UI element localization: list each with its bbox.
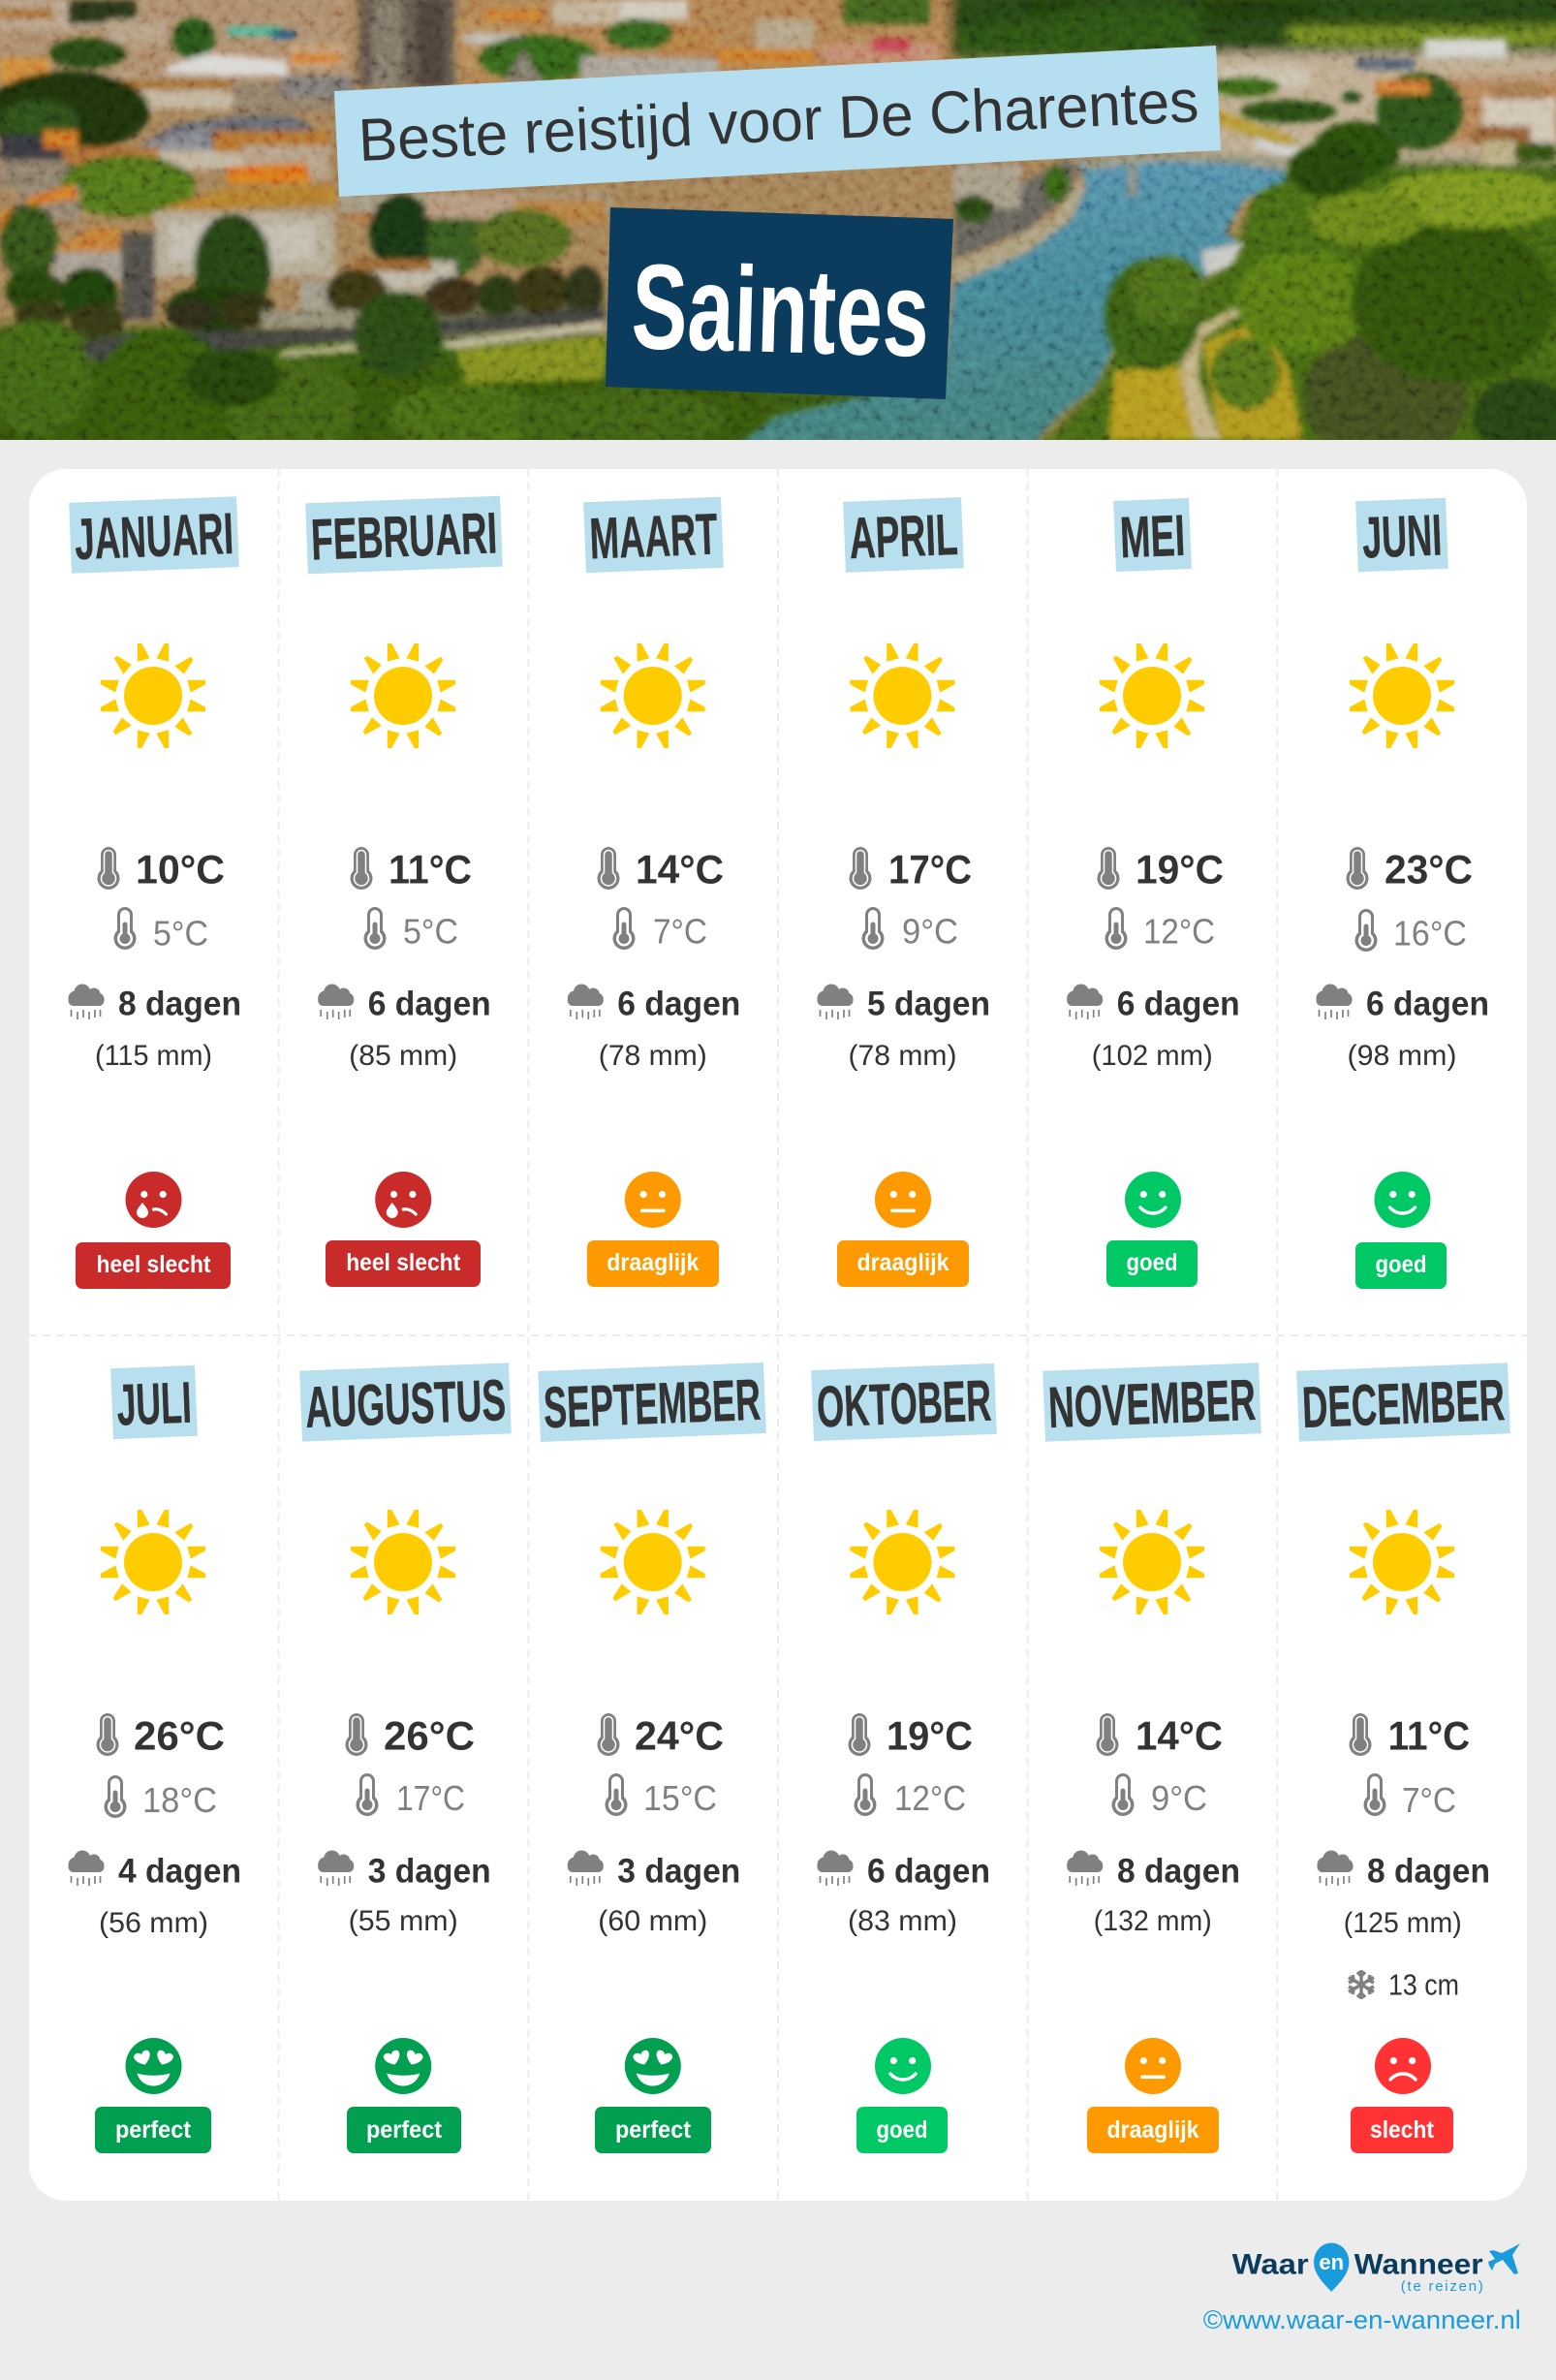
min temperature — [612, 907, 707, 952]
rainfall: (115 mm) — [95, 1040, 212, 1072]
rainfall: (83 mm) — [848, 1905, 957, 1937]
rain days: 6 dagen — [1117, 986, 1240, 1023]
min temperature — [855, 1773, 966, 1818]
rainfall: (56 mm) — [99, 1907, 208, 1939]
rain days — [568, 985, 740, 1023]
min temperature — [357, 1773, 465, 1818]
rating badge: draaglijk — [856, 1249, 949, 1276]
rain days: 3 dagen — [368, 1853, 491, 1891]
panel: oktober — [811, 1363, 997, 2153]
icon: airplane — [1488, 2243, 1520, 2274]
icon: sun — [601, 643, 705, 748]
month label — [69, 496, 239, 574]
month label: AUGUSTUS — [304, 1367, 507, 1440]
icon: sun — [1100, 1510, 1204, 1614]
panel: mei — [1067, 498, 1240, 1287]
rainfall: (78 mm) — [849, 1040, 957, 1072]
max temperature — [849, 847, 972, 892]
panel: maart — [568, 497, 740, 1287]
snowfall — [1349, 1968, 1459, 2002]
month label — [811, 1363, 997, 1441]
rating face — [1125, 2038, 1181, 2094]
logo: Waar en Wanneer: Wanneer — [1354, 2248, 1483, 2281]
icon: map pin — [1314, 2242, 1349, 2292]
rating badge — [347, 2107, 461, 2153]
panel: april — [818, 497, 990, 1287]
month label: FEBRUARI — [310, 500, 498, 573]
rainfall: (60 mm) — [598, 1905, 707, 1937]
icon: sun — [101, 643, 205, 748]
month label — [305, 496, 503, 574]
logo: Waar en Wanneer: Waar — [1232, 2248, 1309, 2281]
min temperature — [114, 907, 208, 954]
rain days: 8 dagen — [1367, 1853, 1490, 1891]
icon: sun — [850, 643, 954, 748]
month label: JANUARI — [74, 501, 234, 572]
rating face — [875, 1172, 931, 1228]
min temperature: 9°C — [1151, 1778, 1207, 1818]
snowfall: 13 cm — [1388, 1968, 1459, 2002]
icon: map pin: en — [1319, 2250, 1344, 2274]
min temperature — [605, 1773, 717, 1818]
rain days: 6 dagen — [368, 986, 491, 1023]
month label: JULI — [115, 1370, 193, 1437]
rating badge: goed — [876, 2116, 928, 2144]
rating face — [1374, 1172, 1430, 1228]
rainfall: (102 mm) — [1092, 1040, 1213, 1072]
rating badge: perfect — [366, 2116, 443, 2144]
month label — [1355, 498, 1448, 572]
month label: NOVEMBER — [1047, 1367, 1257, 1440]
city name: Saintes — [630, 239, 931, 383]
min temperature: 5°C — [403, 911, 458, 952]
city name banner — [606, 207, 953, 399]
rating face — [625, 1172, 681, 1228]
month label — [1043, 1362, 1261, 1442]
month label: MEI — [1119, 503, 1186, 570]
rain days — [1067, 985, 1240, 1023]
icon: sun — [601, 1510, 705, 1614]
panel: december — [1296, 1362, 1510, 2153]
max temperature: 14°C — [636, 847, 724, 892]
month label: OKTOBER — [816, 1368, 992, 1439]
icon: sun — [1100, 643, 1204, 748]
rating face — [875, 2038, 931, 2094]
rating badge: goed — [1126, 1249, 1178, 1276]
month label — [843, 497, 964, 573]
rain days — [818, 985, 990, 1023]
rating badge — [1087, 2107, 1219, 2153]
rainfall: (132 mm) — [1094, 1905, 1212, 1937]
max temperature — [1097, 1713, 1223, 1759]
rain days — [1067, 1851, 1240, 1891]
panel: augustus — [299, 1362, 512, 2153]
main white card — [29, 469, 1527, 2201]
min temperature: 9°C — [902, 911, 958, 952]
rating face — [375, 1172, 431, 1228]
min temperature: 17°C — [396, 1778, 465, 1818]
rain days — [68, 1851, 241, 1891]
photo texture — [0, 0, 1556, 440]
month label — [299, 1362, 512, 1442]
website url: ©www.waar-en-wanneer.nl — [1203, 2305, 1521, 2334]
title text: Beste reistijd voor De Charentes — [357, 68, 1200, 174]
min temperature — [1364, 1773, 1456, 1820]
min temperature — [1354, 909, 1467, 954]
rating face — [1375, 2038, 1431, 2094]
rain days: 3 dagen — [617, 1853, 740, 1891]
rating badge — [1355, 1242, 1447, 1289]
rain days — [318, 985, 491, 1023]
rain days: 8 dagen — [118, 986, 241, 1023]
rain days — [1318, 1851, 1490, 1891]
rainfall: (125 mm) — [1344, 1907, 1462, 1939]
max temperature — [351, 847, 472, 892]
max temperature — [849, 1713, 973, 1759]
max temperature — [1349, 1713, 1470, 1759]
min temperature — [862, 907, 958, 952]
rating face — [126, 2038, 182, 2094]
panel: juli — [68, 1365, 241, 2153]
month label — [1113, 498, 1192, 572]
rain days — [568, 1851, 740, 1891]
rainfall: (85 mm) — [349, 1040, 457, 1072]
rating badge — [595, 2107, 711, 2153]
header photo: aerial view of Saintes — [0, 0, 1556, 465]
rating badge — [95, 2107, 211, 2153]
icon: sun — [1350, 1510, 1454, 1614]
icon: snowflake — [1349, 1970, 1374, 1999]
min temperature: 18°C — [142, 1780, 217, 1820]
panel: januari — [68, 496, 241, 1289]
min temperature: 5°C — [153, 914, 208, 954]
logo: Waar en Wanneer: (te reizen) — [1401, 2278, 1483, 2295]
rainfall: (55 mm) — [349, 1905, 458, 1937]
rain days — [68, 985, 241, 1023]
rating badge — [856, 2107, 948, 2153]
max temperature: 24°C — [635, 1713, 724, 1759]
rating badge: perfect — [115, 2116, 192, 2144]
min temperature: 12°C — [894, 1778, 966, 1818]
rain days — [1316, 985, 1489, 1023]
rating badge: goed — [1376, 1251, 1426, 1278]
icon: sun — [1350, 643, 1454, 748]
rating badge: slecht — [1370, 2116, 1435, 2144]
rain days: 6 dagen — [617, 986, 740, 1023]
rating badge: draaglijk — [1106, 2116, 1199, 2144]
month label: SEPTEMBER — [543, 1367, 762, 1440]
rating face — [375, 2038, 431, 2094]
min temperature: 7°C — [1402, 1780, 1456, 1820]
month label: JUNI — [1361, 502, 1443, 571]
title banner — [334, 46, 1221, 197]
right bank trees and grass — [1105, 39, 1556, 465]
max temperature: 17°C — [888, 847, 972, 892]
month label: APRIL — [848, 502, 959, 571]
rating badge: perfect — [615, 2116, 692, 2144]
min temperature: 12°C — [1143, 911, 1215, 952]
panel: september — [538, 1362, 766, 2153]
rain days — [318, 1851, 491, 1891]
min temperature: 16°C — [1393, 914, 1467, 954]
icon: sun — [351, 1510, 455, 1614]
rating badge — [76, 1242, 231, 1289]
month label — [583, 497, 724, 573]
min temperature — [364, 907, 458, 952]
icon: sun — [850, 1510, 954, 1614]
min temperature — [105, 1775, 217, 1820]
town and trees left — [0, 0, 1068, 455]
max temperature — [97, 847, 225, 892]
rain days: 5 dagen — [867, 986, 990, 1023]
rating face — [1125, 1172, 1181, 1228]
rainfall: (98 mm) — [1347, 1040, 1457, 1072]
min temperature: 15°C — [643, 1778, 717, 1818]
max temperature: 11°C — [1388, 1713, 1470, 1759]
rating badge — [1351, 2107, 1453, 2153]
rating badge — [837, 1240, 969, 1287]
rating badge: heel slecht — [97, 1251, 211, 1278]
rain days: 6 dagen — [1366, 986, 1489, 1023]
rating badge — [587, 1240, 719, 1287]
max temperature: 23°C — [1385, 847, 1473, 892]
river — [736, 107, 1308, 446]
rating face — [126, 1172, 182, 1228]
max temperature: 19°C — [1136, 847, 1224, 892]
rating badge — [1106, 1240, 1198, 1287]
icon: sun — [351, 643, 455, 748]
rain days: 8 dagen — [1117, 1853, 1240, 1891]
panel: juni — [1316, 498, 1489, 1289]
max temperature: 19°C — [887, 1713, 973, 1759]
max temperature — [597, 847, 724, 892]
min temperature — [1112, 1773, 1207, 1818]
rain days: 6 dagen — [867, 1853, 990, 1891]
panel: november — [1043, 1362, 1261, 2153]
max temperature: 26°C — [134, 1713, 225, 1759]
rating badge — [326, 1240, 481, 1287]
rating badge: draaglijk — [607, 1249, 699, 1276]
max temperature — [597, 1713, 724, 1759]
month label: MAART — [588, 501, 719, 572]
rating face — [625, 2038, 681, 2094]
month label — [110, 1365, 198, 1439]
rainfall: (78 mm) — [599, 1040, 707, 1072]
month label — [538, 1362, 766, 1442]
max temperature: 14°C — [1136, 1713, 1223, 1759]
panel: februari — [305, 496, 503, 1287]
max temperature — [1347, 847, 1473, 892]
rain days — [818, 1851, 990, 1891]
rating badge: heel slecht — [346, 1249, 461, 1276]
rain days: 4 dagen — [118, 1853, 241, 1891]
max temperature: 11°C — [389, 847, 472, 892]
min temperature: 7°C — [653, 911, 707, 952]
min temperature — [1105, 907, 1215, 952]
max temperature: 10°C — [136, 847, 225, 892]
logo: Waar en Wanneer — [1232, 2242, 1520, 2295]
max temperature — [1097, 847, 1224, 892]
max temperature: 26°C — [384, 1713, 475, 1759]
icon: sun — [101, 1510, 205, 1614]
